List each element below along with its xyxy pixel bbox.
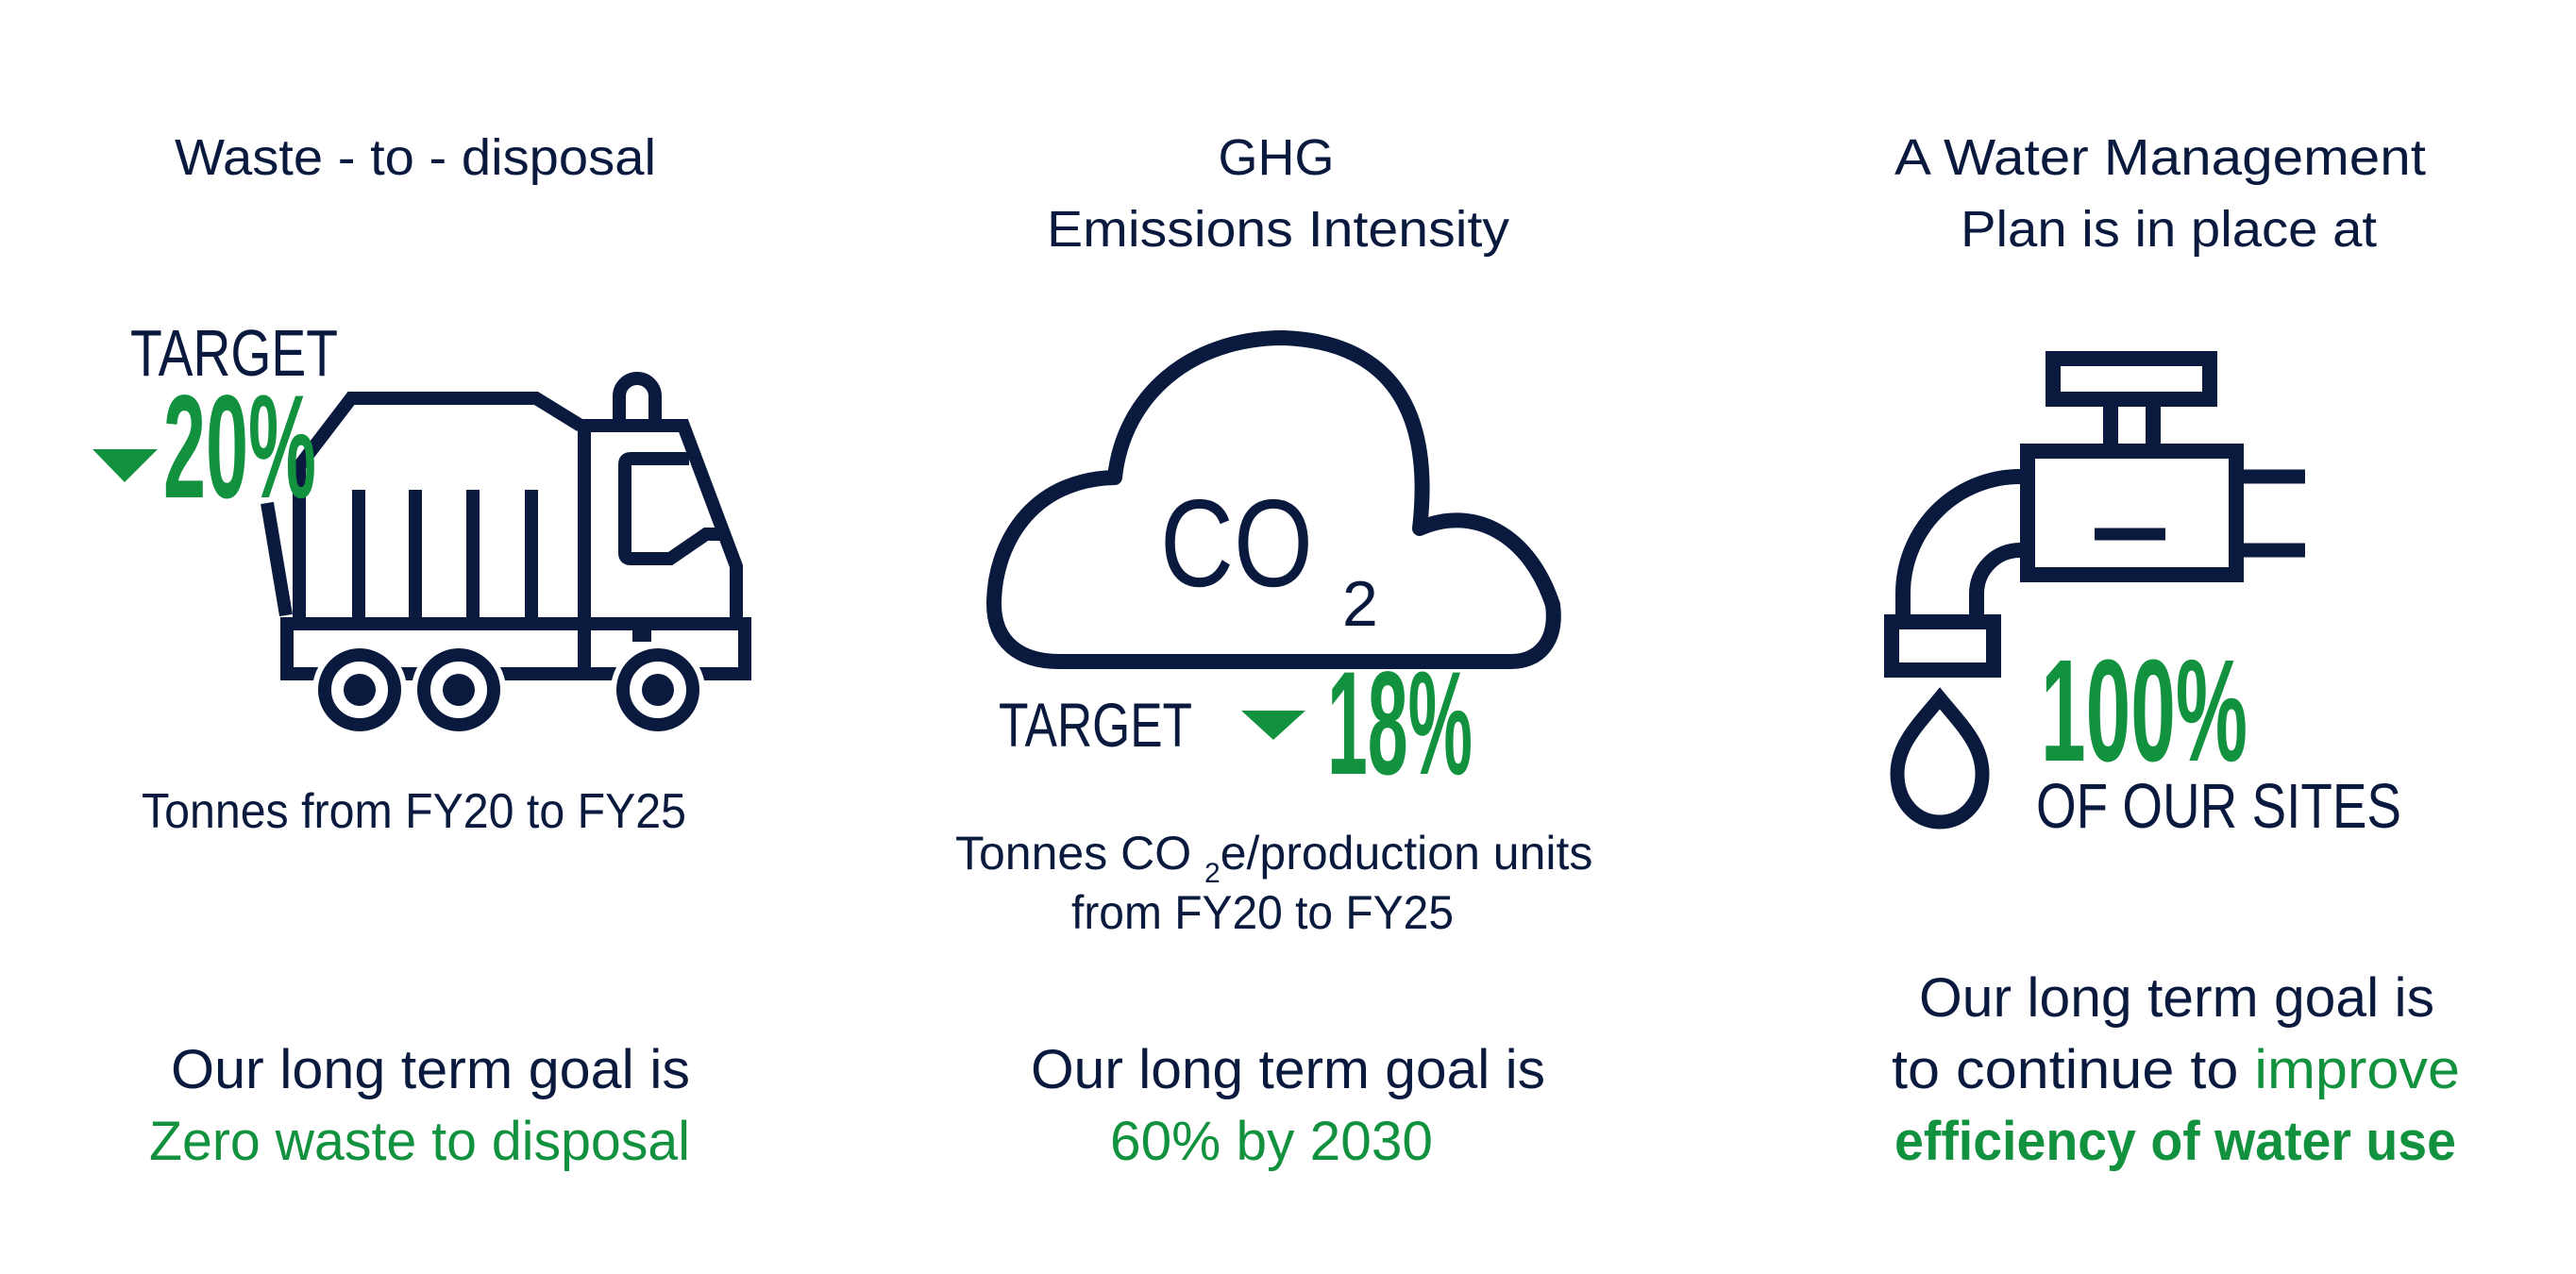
icon: truck [267, 378, 745, 737]
caption: e/production units [1221, 827, 1592, 880]
panel: water [1892, 129, 2460, 1172]
goal: Our long term goal is [1919, 967, 2434, 1029]
goal: Our long term goal is [1031, 1039, 1545, 1100]
heading: GHG: Emissions Intensity [1047, 201, 1509, 258]
caption: Tonnes from FY20 to FY25 [142, 784, 686, 839]
icon: cloud: 2 [1342, 568, 1378, 640]
panel: waste [93, 129, 745, 1172]
icon: drop [1897, 698, 1982, 822]
label: target: TARGET [130, 316, 338, 390]
heading: water [1894, 129, 2426, 258]
icon: down triangle [93, 449, 158, 482]
label: of our sites: OF OUR SITES [2036, 771, 2401, 842]
caption: 2 [1204, 858, 1221, 889]
icon: down triangle [1241, 711, 1305, 740]
goal: Zero waste to disposal [149, 1111, 690, 1172]
value: 100%: 100% [2041, 629, 2248, 792]
value: 20%: 20% [163, 365, 316, 529]
icon: cloud: CO [1160, 474, 1313, 612]
goal: Our long term goal is [171, 1039, 690, 1100]
panel: GHG [955, 129, 1592, 1172]
icon: cloud [994, 338, 1554, 662]
caption [955, 827, 1592, 939]
caption: Tonnes CO [955, 827, 1191, 880]
goal: to continue to improve [1892, 1039, 2460, 1100]
heading: water: A Water Management [1894, 129, 2426, 186]
goal [149, 1039, 690, 1172]
panel: GHG: 18% [1327, 642, 1473, 806]
goal: 60% by 2030 [1110, 1111, 1433, 1172]
heading: water: Plan is in place at [1961, 201, 2377, 258]
heading: waste: Waste - to - disposal [175, 129, 656, 186]
heading: GHG: GHG [1218, 129, 1335, 186]
label: target: TARGET [999, 690, 1192, 760]
goal: efficiency of water use [1894, 1111, 2456, 1172]
caption: from FY20 to FY25 [1071, 886, 1454, 939]
goal [1031, 1039, 1545, 1172]
heading: GHG [1047, 129, 1509, 258]
goal [1892, 967, 2460, 1172]
icon: tap [1892, 359, 2305, 670]
